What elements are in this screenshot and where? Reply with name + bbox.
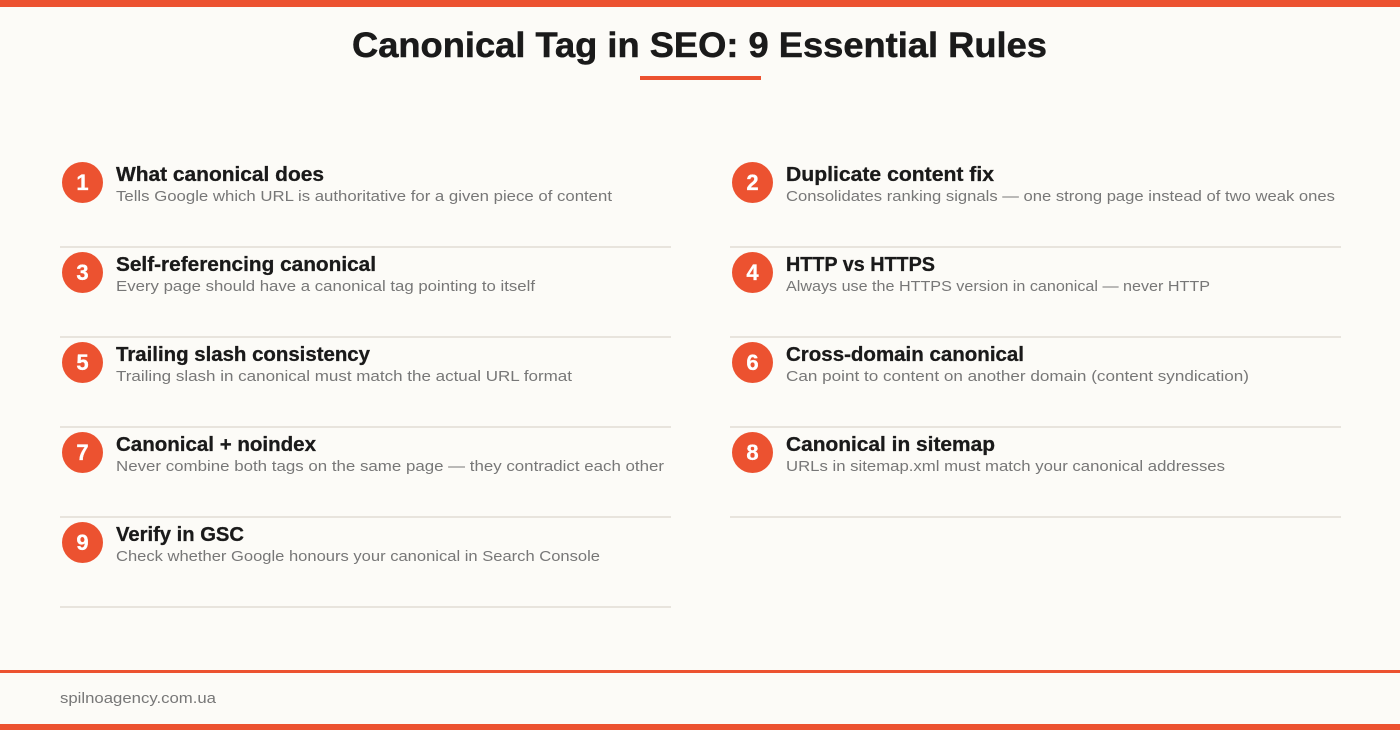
footer rule <box>0 670 1400 673</box>
rule 8: URLs in sitemap.xml must match your canonical addresses <box>786 458 1225 475</box>
footer source text: spilnoagency.com.ua <box>60 690 217 707</box>
rule 4: 4 <box>746 260 759 285</box>
rule 2: 2 <box>746 170 759 195</box>
rule 8: Canonical in sitemap <box>786 434 995 456</box>
rule 2: Duplicate content fix <box>786 164 994 186</box>
rule 5: Trailing slash in canonical must match the actual URL format <box>116 368 573 385</box>
rule 8: 8 <box>746 440 759 465</box>
rule 5: Trailing slash consistency <box>116 344 371 366</box>
rule 3: 3 <box>76 260 89 285</box>
rule 1: What canonical does <box>116 164 324 186</box>
rule 1 <box>60 162 671 248</box>
rule 7: Never combine both tags on the same page — they contradict each other <box>116 458 664 475</box>
title underline <box>640 76 761 80</box>
rule 9: 9 <box>76 530 89 555</box>
rule 7: Canonical + noindex <box>116 434 316 456</box>
rule 6: Cross-domain canonical <box>786 344 1024 366</box>
rule 2: Consolidates ranking signals — one strong page instead of two weak ones <box>786 188 1335 205</box>
top accent bar <box>0 0 1400 7</box>
rule 5 <box>60 342 671 428</box>
rule 6: 6 <box>746 350 759 375</box>
rule 3 <box>60 252 671 338</box>
rule 2 <box>730 162 1341 248</box>
rule 6 <box>730 342 1341 428</box>
rule 7: 7 <box>76 440 89 465</box>
rule 3: Self-referencing canonical <box>116 254 376 276</box>
rule 9: Check whether Google honours your canonical in Search Console <box>116 548 600 565</box>
rule 7 <box>60 432 671 518</box>
rule 9: Verify in GSC <box>116 524 244 546</box>
rule 1: 1 <box>76 170 89 195</box>
rule 6: Can point to content on another domain (content syndication) <box>786 368 1249 385</box>
title: Canonical Tag in SEO: 9 Essential Rules <box>352 26 1047 65</box>
rule 9 <box>60 522 671 608</box>
bottom accent bar <box>0 724 1400 730</box>
rule 4: HTTP vs HTTPS <box>786 254 935 276</box>
rule 4 <box>730 252 1341 338</box>
rule 3: Every page should have a canonical tag pointing to itself <box>116 278 536 295</box>
rule 1: Tells Google which URL is authoritative for a given piece of content <box>116 188 613 205</box>
rule 4: Always use the HTTPS version in canonical — never HTTP <box>786 278 1210 295</box>
rule 5: 5 <box>76 350 89 375</box>
rule 8 <box>730 432 1341 518</box>
